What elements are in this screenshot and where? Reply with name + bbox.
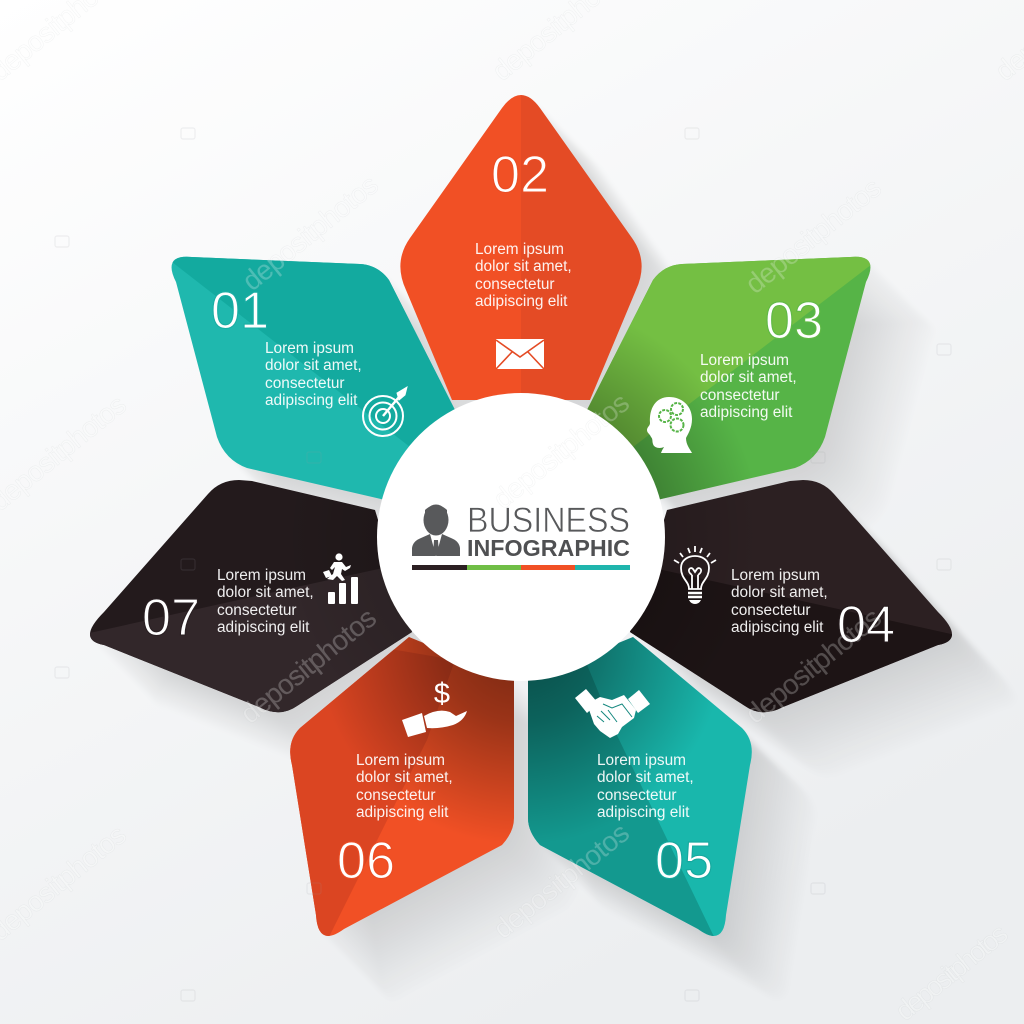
- text block 03: Lorem ipsum: [700, 352, 789, 369]
- watermarks: depositphotos: [739, 602, 887, 730]
- watermark camera marks: [55, 128, 951, 1001]
- number 01: 01: [211, 282, 269, 340]
- text block 03: consectetur: [700, 387, 780, 404]
- text block 05: adipiscing elit: [597, 804, 690, 821]
- icon: handshake: [575, 689, 650, 738]
- icon: businessman: [412, 504, 460, 556]
- text block 01: Lorem ipsum: [265, 340, 354, 357]
- centre circle: [377, 393, 665, 681]
- text block 05: Lorem ipsum: [597, 752, 686, 769]
- number 05: 05: [655, 832, 713, 890]
- text block 03: adipiscing elit: [700, 404, 793, 421]
- watermarks: depositphotos: [487, 387, 635, 515]
- petal 05 teal: [528, 637, 752, 936]
- title: BUSINESS: [467, 501, 630, 540]
- text block 02: dolor sit amet,: [475, 258, 572, 275]
- text block 04: consectetur: [731, 602, 811, 619]
- text block 05: dolor sit amet,: [597, 769, 694, 786]
- text block 01: consectetur: [265, 375, 345, 392]
- text block 07: adipiscing elit: [217, 619, 310, 636]
- number 02: 02: [491, 146, 549, 204]
- icon: head with gears: [647, 397, 692, 453]
- petal 02 orange: [400, 95, 642, 400]
- watermarks: depositphotos: [739, 172, 887, 300]
- icon: light bulb: [674, 546, 716, 604]
- text block 05: consectetur: [597, 787, 677, 804]
- number 07: 07: [142, 589, 200, 647]
- long shadows behind petals: [92, 97, 1016, 1000]
- text block 02: Lorem ipsum: [475, 241, 564, 258]
- petal 01 teal: [172, 256, 455, 500]
- text block 04: Lorem ipsum: [731, 567, 820, 584]
- text block 07: Lorem ipsum: [217, 567, 306, 584]
- text block 07: consectetur: [217, 602, 297, 619]
- icon: hand with dollar: [402, 678, 467, 737]
- watermarks: depositphotos: [234, 602, 382, 730]
- icon: hand with dollar: $: [434, 678, 450, 710]
- text block 04: dolor sit amet,: [731, 584, 828, 601]
- text block 06: adipiscing elit: [356, 804, 449, 821]
- icon: target: [363, 387, 407, 436]
- petal 03 green: [587, 256, 870, 500]
- watermarks: depositphotos: [236, 169, 384, 297]
- petal 06 orange: [290, 637, 514, 936]
- petal 04 dark: [630, 480, 952, 712]
- number 03: 03: [765, 292, 823, 350]
- icon: runner on bars: [323, 553, 358, 604]
- watermarks: depositphotos: [487, 817, 635, 945]
- text block 02: consectetur: [475, 276, 555, 293]
- colour bar: [412, 565, 630, 570]
- text block 06: consectetur: [356, 787, 436, 804]
- subtitle: INFOGRAPHIC: [467, 535, 630, 561]
- text block 04: adipiscing elit: [731, 619, 824, 636]
- icon: envelope: [496, 339, 544, 369]
- watermarks: depositphotos: [889, 918, 1014, 1024]
- text block 06: dolor sit amet,: [356, 769, 453, 786]
- text block 07: dolor sit amet,: [217, 584, 314, 601]
- text block 02: adipiscing elit: [475, 293, 568, 310]
- number 04: 04: [837, 596, 895, 654]
- number 06: 06: [337, 832, 395, 890]
- text block 06: Lorem ipsum: [356, 752, 445, 769]
- petal 07 dark: [90, 480, 412, 712]
- text block 01: adipiscing elit: [265, 392, 358, 409]
- text block 03: dolor sit amet,: [700, 369, 797, 386]
- text block 01: dolor sit amet,: [265, 357, 362, 374]
